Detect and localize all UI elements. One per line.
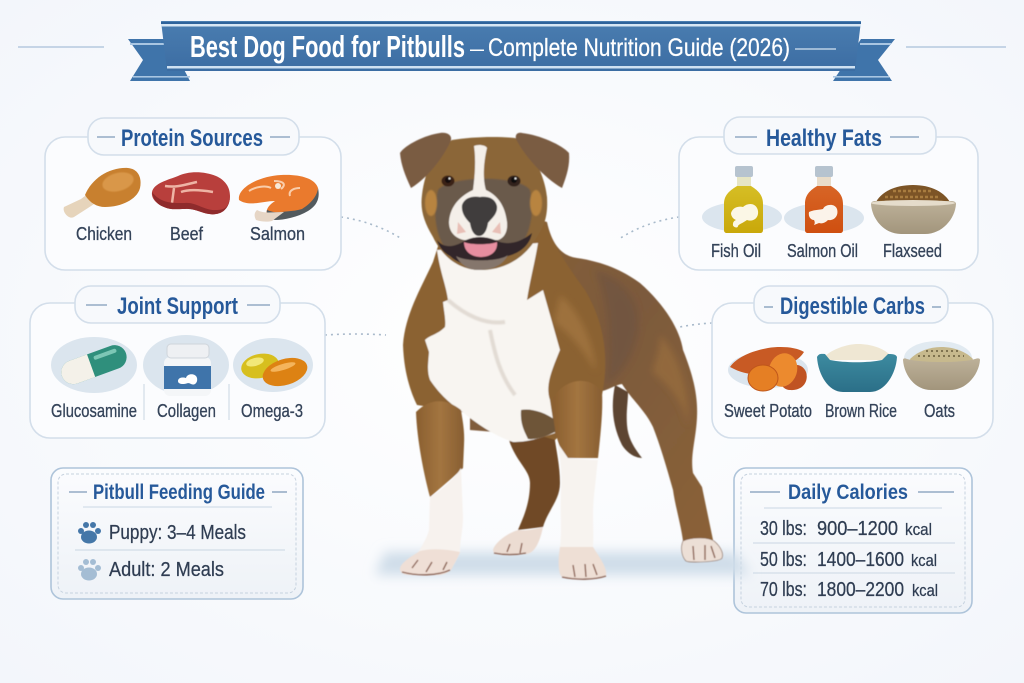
tongue: [464, 242, 497, 257]
row: 70 lbs: 70 lbs:: [760, 579, 807, 601]
icon: collagen jar: [143, 335, 229, 396]
title trailing rule: [795, 48, 836, 50]
icon: beef steak: [152, 172, 230, 214]
row: 30 lbs: [760, 518, 932, 540]
protein heading: Protein Sources: [121, 125, 263, 152]
label: brown rice: Brown Rice: [825, 401, 897, 421]
fats heading: [724, 117, 936, 154]
row: 30 lbs: 900–1200: [817, 518, 898, 540]
dog illustration: [400, 133, 723, 579]
flank shading: [595, 270, 638, 385]
white blaze and muzzle: [449, 145, 507, 240]
dog ground shadow: [375, 552, 750, 575]
label: collagen: Collagen: [157, 401, 216, 421]
carbs heading: Digestible Carbs: [780, 293, 925, 320]
row: 30 lbs: kcal: [905, 520, 932, 539]
carbs heading: [754, 286, 948, 323]
title text: Best Dog Food for Pitbulls: [190, 29, 465, 64]
right ear: [516, 133, 569, 188]
icon: fish oil bottle: [702, 166, 782, 233]
front right paw: [559, 547, 606, 579]
label: oats: Oats: [924, 401, 955, 421]
protein heading: [88, 118, 299, 155]
label: salmon oil: Salmon Oil: [787, 241, 858, 261]
tail: [613, 385, 642, 458]
row: 50 lbs: 1400–1600: [817, 549, 904, 571]
dotted connectors: [325, 217, 712, 335]
toe lines: [402, 543, 715, 579]
panel: daily calories: [734, 468, 972, 613]
tan cheeks: [425, 190, 437, 216]
decorative header rules: [18, 46, 1006, 48]
hind paw: [682, 538, 723, 562]
label: omega-3: Omega-3: [241, 401, 303, 421]
row: 50 lbs: 50 lbs:: [760, 549, 807, 571]
label: beef: Beef: [170, 224, 204, 244]
hind leg highlights: [652, 335, 688, 425]
label: salmon: Salmon: [250, 224, 305, 244]
icon: chicken drumstick: [64, 168, 141, 218]
title dash: –: [470, 36, 485, 61]
far front paw: [493, 527, 543, 554]
panel: joint support: [30, 286, 325, 438]
panel: protein sources: [45, 118, 341, 270]
icon: omega-3 softgels: [233, 338, 313, 392]
column dividers: [144, 384, 229, 420]
adult row: Adult: 2 Meals: [109, 559, 224, 581]
shoulder highlight: [554, 295, 596, 372]
front right white sock: [557, 442, 598, 547]
feeding heading: Pitbull Feeding Guide: [93, 481, 265, 504]
row: 50 lbs: kcal: [911, 551, 937, 570]
icon: sweet potato: [728, 347, 808, 391]
icon: flaxseed bowl: [871, 185, 956, 234]
dog head: [400, 133, 569, 270]
panel: healthy fats: [679, 117, 978, 270]
title subtitle: Complete Nutrition Guide (2026): [488, 34, 790, 62]
joint heading: [75, 286, 280, 323]
front left white sock: [410, 468, 463, 570]
pink muzzle tint: [457, 222, 501, 234]
front torso brown: [403, 222, 605, 440]
label: glucosamine: Glucosamine: [51, 401, 137, 421]
puppy row: Puppy: 3–4 Meals: [109, 522, 246, 544]
icon: glucosamine capsule: [51, 337, 137, 393]
label: chicken: Chicken: [76, 224, 132, 244]
mouth: [437, 233, 532, 266]
row: 30 lbs: 30 lbs:: [760, 518, 807, 540]
label: fish oil: Fish Oil: [711, 241, 761, 261]
fats heading: Healthy Fats: [766, 125, 882, 152]
icon: salmon oil bottle: [784, 166, 864, 233]
panel: digestible carbs: [712, 286, 993, 438]
panel: feeding guide: [51, 468, 303, 599]
head base: [421, 137, 547, 270]
front left leg: [416, 401, 464, 497]
body and hind leg: [470, 200, 713, 541]
chest brown patch: [521, 409, 555, 439]
label: flaxseed: Flaxseed: [883, 241, 942, 261]
icon: brown rice bowl: [817, 344, 897, 392]
row: 50 lbs: [760, 549, 937, 571]
white chest: [425, 243, 560, 442]
grey muzzle surround: [435, 179, 532, 254]
chest shading: [448, 300, 515, 395]
icon: salmon steak: [239, 175, 319, 222]
left ear: [400, 133, 451, 188]
eyes: [442, 176, 520, 186]
front right leg: [553, 381, 602, 458]
row: 70 lbs: kcal: [912, 581, 938, 600]
far front leg: [509, 433, 560, 530]
icon: oats bowl: [903, 341, 980, 390]
row: 70 lbs: [760, 579, 938, 601]
joint heading: Joint Support: [117, 293, 238, 320]
row: 70 lbs: 1800–2200: [817, 579, 904, 601]
front left paw: [400, 549, 460, 575]
label: sweet potato: Sweet Potato: [724, 401, 812, 421]
lower chin: [456, 255, 508, 270]
calories heading: Daily Calories: [788, 481, 908, 504]
title banner: [128, 21, 895, 81]
icon: puppy paw: [78, 522, 101, 544]
icon: adult paw: [78, 559, 101, 580]
nose: [462, 197, 497, 236]
